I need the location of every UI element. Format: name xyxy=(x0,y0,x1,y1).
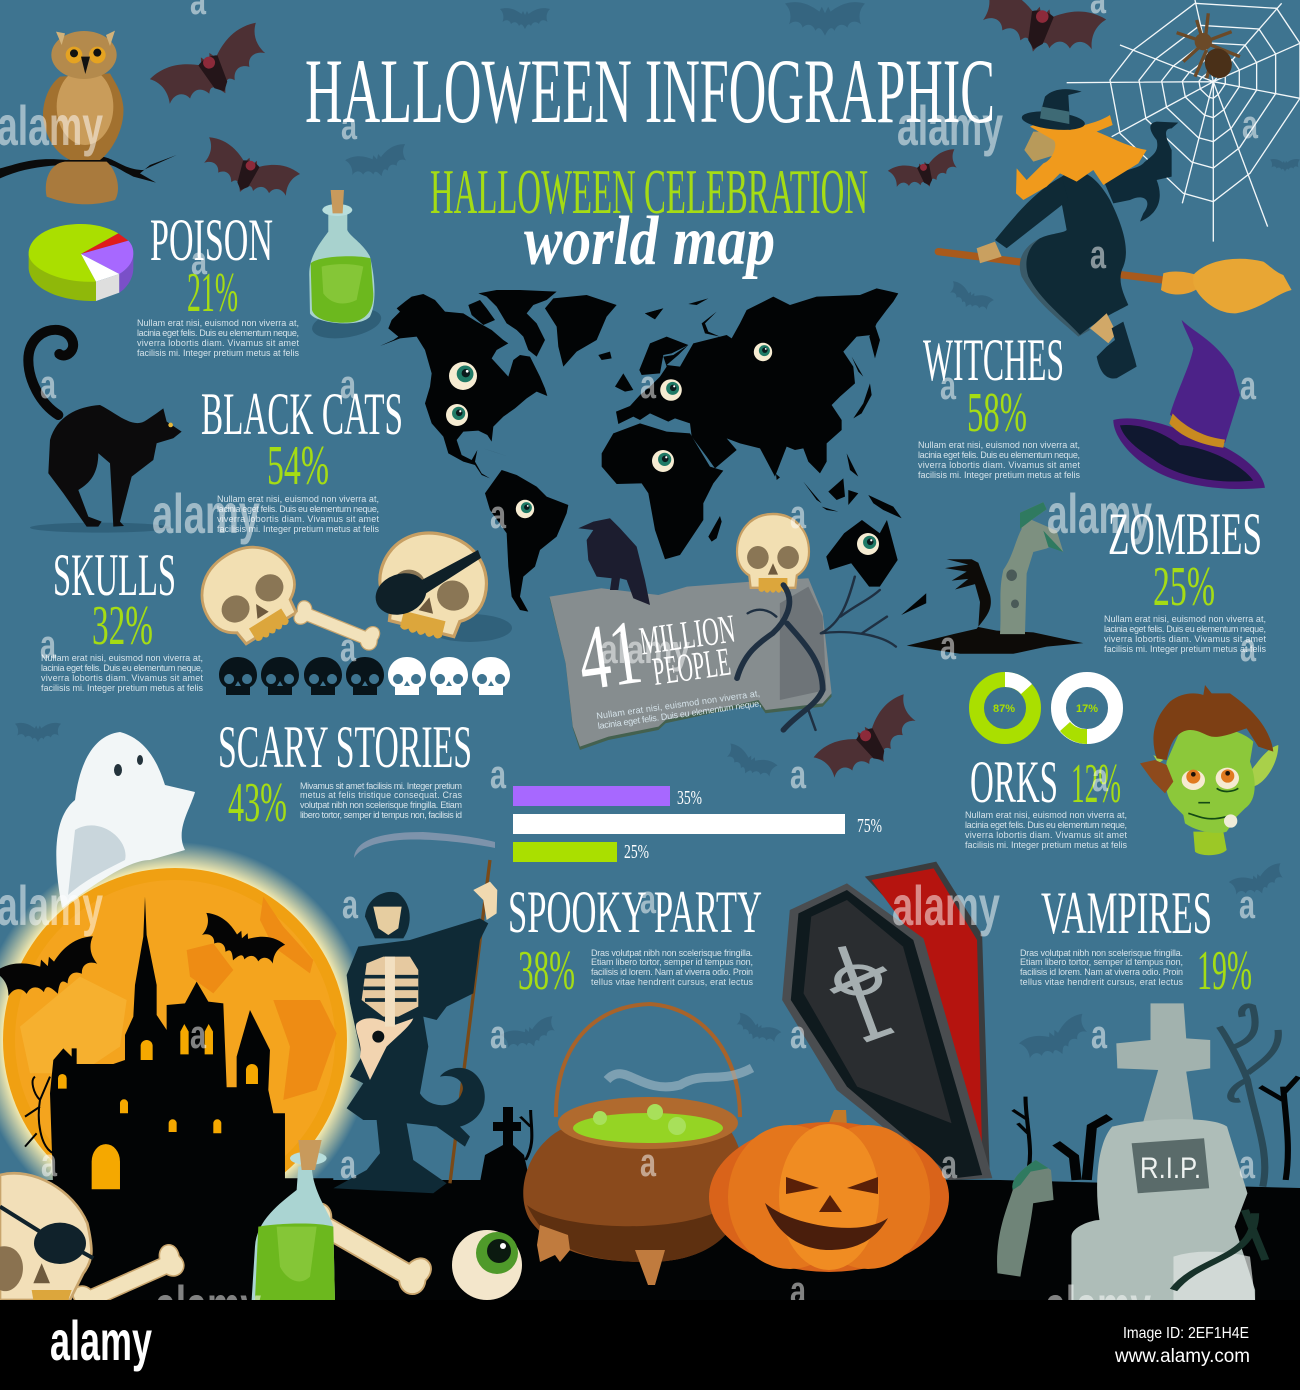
stock watermarks: a xyxy=(490,753,507,797)
text: scary stories: Mivamus sit amet facilisis mi. Integer pretium xyxy=(300,781,462,791)
stock watermarks: a xyxy=(1240,364,1257,408)
text: black cats: Nullam erat nisi, euismod non viverra at, xyxy=(217,494,379,504)
value: zombies: 25% xyxy=(1153,556,1215,618)
stone plaque xyxy=(550,578,832,750)
stock watermarks: a xyxy=(340,626,357,670)
illustration: coffins xyxy=(782,862,992,1180)
stock watermarks: a xyxy=(790,1269,807,1313)
bar chart xyxy=(513,786,882,863)
stock watermarks: a xyxy=(340,363,357,407)
text: orks: Nullam erat nisi, euismod non viverra at, xyxy=(965,810,1127,820)
text: black cats: lacinia eget felis. Duis eu elementum neque, xyxy=(217,504,379,514)
text: skulls: lacinia eget felis. Duis eu elementum neque, xyxy=(41,663,203,673)
illustration: green bottle xyxy=(252,1140,335,1300)
heading: poison: POISON xyxy=(150,207,273,273)
raven xyxy=(578,518,650,605)
illustration: bare trees and background zombie hands xyxy=(520,1006,1298,1187)
text: spooky party: Dras volutpat nibh non scelerisque fringilla. xyxy=(591,948,753,958)
skull on plaque xyxy=(737,514,809,593)
stock watermarks: a xyxy=(490,1013,507,1057)
donut chart: 87%: 87% xyxy=(993,703,1015,715)
donut chart: 87% xyxy=(976,672,1034,736)
bar chart: 35% xyxy=(677,787,702,809)
small cross silhouette xyxy=(480,1107,530,1182)
text: spooky party: Etiam libero tortor, semper id tempus non, xyxy=(591,957,753,967)
heading: witches: WITCHES xyxy=(923,327,1064,393)
plaque text: million: MILLION xyxy=(637,606,738,664)
value: black cats: 54% xyxy=(267,435,329,497)
text: vampires xyxy=(1020,948,1184,987)
text: scary stories xyxy=(300,781,462,820)
stock watermarks: alamy xyxy=(892,874,1000,937)
stock watermarks: a xyxy=(1239,883,1256,927)
footer logo: alamy xyxy=(50,1309,152,1372)
illustration: bottom skull with eyepatch xyxy=(0,1173,93,1300)
illustration: poison pie chart xyxy=(29,224,133,301)
illustration: witch on broom xyxy=(938,89,1292,379)
stock watermarks: alamy xyxy=(0,874,103,937)
illustration: jack-o-lantern pumpkin xyxy=(709,1110,949,1272)
bar chart: 25% xyxy=(624,841,649,863)
text: skulls: Nullam erat nisi, euismod non viverra at, xyxy=(41,653,203,663)
stock watermarks: a xyxy=(790,493,807,537)
illustration: zombie hand xyxy=(997,1160,1054,1277)
stock watermarks: a xyxy=(941,1143,958,1187)
stock watermarks: alamy xyxy=(1047,482,1152,545)
footer image id: Image ID: 2EF1H4E xyxy=(1123,1325,1249,1342)
illustration: grim reaper xyxy=(333,832,497,1193)
plaque text: people: PEOPLE xyxy=(650,639,733,694)
skull icon row xyxy=(219,657,510,695)
stock watermarks: alamy xyxy=(155,1274,261,1337)
stock watermarks: a xyxy=(40,363,57,407)
infographic canvas: 12% xyxy=(1071,753,1121,815)
text: poison: lacinia eget felis. Duis eu elementum neque, xyxy=(137,328,299,338)
stock watermarks: a xyxy=(1242,103,1259,147)
text: spooky party xyxy=(591,948,754,987)
illustration: owl on branch xyxy=(0,31,177,204)
map: Americas and Greenland xyxy=(380,290,663,612)
spider xyxy=(1177,13,1240,82)
text: spooky party: tellus vitae hendrerit cursus, erat lectus xyxy=(591,977,754,987)
donut chart: 17% xyxy=(1058,680,1116,744)
heading: skulls: SKULLS xyxy=(53,542,176,608)
stock watermarks: alamy xyxy=(600,628,691,672)
text: witches: Nullam erat nisi, euismod non viverra at, xyxy=(918,440,1080,450)
heading: spooky party: SPOOKY PARTY xyxy=(508,879,762,945)
world map xyxy=(380,288,926,615)
stock watermarks: a xyxy=(790,1013,807,1057)
bare tree on plaque xyxy=(737,577,896,730)
stock watermarks: a xyxy=(1092,756,1109,800)
text: zombies: Nullam erat nisi, euismod non viverra at, xyxy=(1104,614,1266,624)
stock watermarks: alamy xyxy=(0,94,103,157)
text: poison: facilisis mi. Integer pretium metus at felis xyxy=(137,348,300,358)
plaque small text: lacinia eget felis. Duis eu elementum neque, xyxy=(597,698,762,731)
stock watermarks: a xyxy=(342,883,359,927)
subtitle: celebration: HALLOWEEN CELEBRATION xyxy=(430,156,868,227)
stock watermarks: a xyxy=(40,623,57,667)
stock watermarks: a xyxy=(190,1013,207,1057)
text: witches: lacinia eget felis. Duis eu elementum neque, xyxy=(918,450,1080,460)
illustration: zombie hands xyxy=(907,502,1083,654)
text: poison xyxy=(137,318,300,358)
text: zombies: viverra lobortis diam. Vivamus sit amet xyxy=(1104,634,1266,644)
stock watermarks: a xyxy=(1240,626,1257,670)
infographic canvas: 21% xyxy=(187,262,238,324)
text: black cats: viverra lobortis diam. Vivamus sit amet xyxy=(217,514,379,524)
value: spooky party: 38% xyxy=(518,940,575,1002)
stock watermarks: alamy xyxy=(897,94,1003,157)
stock watermarks: a xyxy=(940,624,957,668)
footer bar xyxy=(0,1300,1300,1390)
subtitle: world map: world map xyxy=(524,203,775,280)
map eyeball markers xyxy=(446,343,879,555)
spider web xyxy=(1067,0,1300,242)
value: scary stories: 43% xyxy=(228,772,287,834)
ground silhouette xyxy=(0,1178,1300,1300)
stock watermarks: a xyxy=(640,363,657,407)
text: scary stories: metus at felis tristique consequat. Cras xyxy=(300,790,462,800)
text: black cats: facilisis mi. Integer pretium metus at felis xyxy=(217,524,380,534)
illustration: castle xyxy=(25,897,333,1300)
illustration: witch hat xyxy=(1113,320,1265,489)
text: orks xyxy=(965,810,1128,850)
stock watermarks: a xyxy=(191,239,208,283)
text: zombies: lacinia eget felis. Duis eu elementum neque, xyxy=(1104,624,1266,634)
heading: scary stories: SCARY STORIES xyxy=(218,714,472,780)
text: skulls xyxy=(41,653,204,693)
stock watermarks: a xyxy=(640,1141,657,1185)
illustration: bottom bones xyxy=(69,1197,436,1319)
text: scary stories: volutpat nibh non scelerisque fringilla. Etiam xyxy=(300,800,462,810)
text: witches: facilisis mi. Integer pretium metus at felis xyxy=(918,470,1080,480)
stock watermarks: alamy xyxy=(1045,1274,1151,1337)
value: skulls: 32% xyxy=(92,595,153,657)
illustration: tombstone xyxy=(1071,1003,1265,1300)
text: witches xyxy=(918,440,1080,480)
text: vampires: facilisis id lorem. Nam at viverra odio. Proin xyxy=(1020,967,1183,977)
plaque small text: Nullam erat nisi, euismod non viverra at, xyxy=(596,688,761,721)
illustration: colored bats xyxy=(149,0,1107,793)
stock watermarks: a xyxy=(640,878,657,922)
text: vampires: tellus vitae hendrerit cursus, erat lectus xyxy=(1020,977,1184,987)
text: poison: Nullam erat nisi, euismod non viverra at, xyxy=(137,318,299,328)
illustration: moon bats xyxy=(0,911,286,1012)
stock watermarks: a xyxy=(1239,1143,1256,1187)
stock watermarks: a xyxy=(341,104,358,148)
text: black cats xyxy=(217,494,380,534)
stock watermarks: a xyxy=(1091,1013,1108,1057)
illustration: black cat xyxy=(28,330,182,533)
text: spooky party: facilisis id lorem. Nam at viverra odio. Proin xyxy=(591,967,753,977)
illustration: skulls and bone xyxy=(186,522,512,658)
map: Eurasia and Africa xyxy=(602,288,902,559)
text: vampires: Dras volutpat nibh non scelerisque fringilla. xyxy=(1020,948,1183,958)
illustration: ork head xyxy=(1140,685,1278,855)
text: witches: viverra lobortis diam. Vivamus sit amet xyxy=(918,460,1080,470)
stock watermarks: a xyxy=(41,1141,58,1185)
illustration: moon xyxy=(0,842,373,1238)
plaque text: 41: 41 xyxy=(572,600,647,710)
heading: orks: ORKS xyxy=(970,749,1058,815)
stock watermarks: a xyxy=(340,1143,357,1187)
footer url: www.alamy.com xyxy=(1114,1346,1250,1367)
text: zombies: facilisis mi. Integer pretium metus at felis xyxy=(1104,644,1266,654)
illustration: ghost xyxy=(56,732,195,908)
text: orks: viverra lobortis diam. Vivamus sit amet xyxy=(965,830,1127,840)
value: witches: 58% xyxy=(967,382,1027,444)
text: skulls: viverra lobortis diam. Vivamus sit amet xyxy=(41,673,203,683)
tombstone text: R.I.P. xyxy=(1140,1152,1201,1185)
text: poison: viverra lobortis diam. Vivamus sit amet xyxy=(137,338,299,348)
stock watermarks: a xyxy=(940,364,957,408)
donut chart: 17%: 17% xyxy=(1076,703,1098,715)
illustration: eyeball xyxy=(452,1230,522,1300)
stock watermarks: alamy xyxy=(152,482,260,545)
text: orks: lacinia eget felis. Duis eu elementum neque, xyxy=(965,820,1127,830)
text: scary stories: libero tortor, semper id tempus non, facilisis id xyxy=(300,810,462,820)
background shadow bats xyxy=(15,2,1300,1069)
text: zombies xyxy=(1104,614,1266,654)
text: orks: facilisis mi. Integer pretium metus at felis xyxy=(965,840,1128,850)
text: skulls: facilisis mi. Integer pretium metus at felis xyxy=(41,683,204,693)
bar chart: 75% xyxy=(857,815,882,837)
stock watermarks: a xyxy=(490,493,507,537)
value: vampires: 19% xyxy=(1197,940,1252,1002)
stock watermarks: a xyxy=(790,753,807,797)
text: vampires: Etiam libero tortor, semper id tempus non, xyxy=(1020,957,1183,967)
illustration: cauldron xyxy=(523,1004,752,1285)
stock watermarks: a xyxy=(1090,233,1107,277)
heading: black cats: BLACK CATS xyxy=(201,381,403,447)
map: Australia and New Zealand xyxy=(826,520,926,615)
illustration: poison bottle xyxy=(309,190,384,343)
